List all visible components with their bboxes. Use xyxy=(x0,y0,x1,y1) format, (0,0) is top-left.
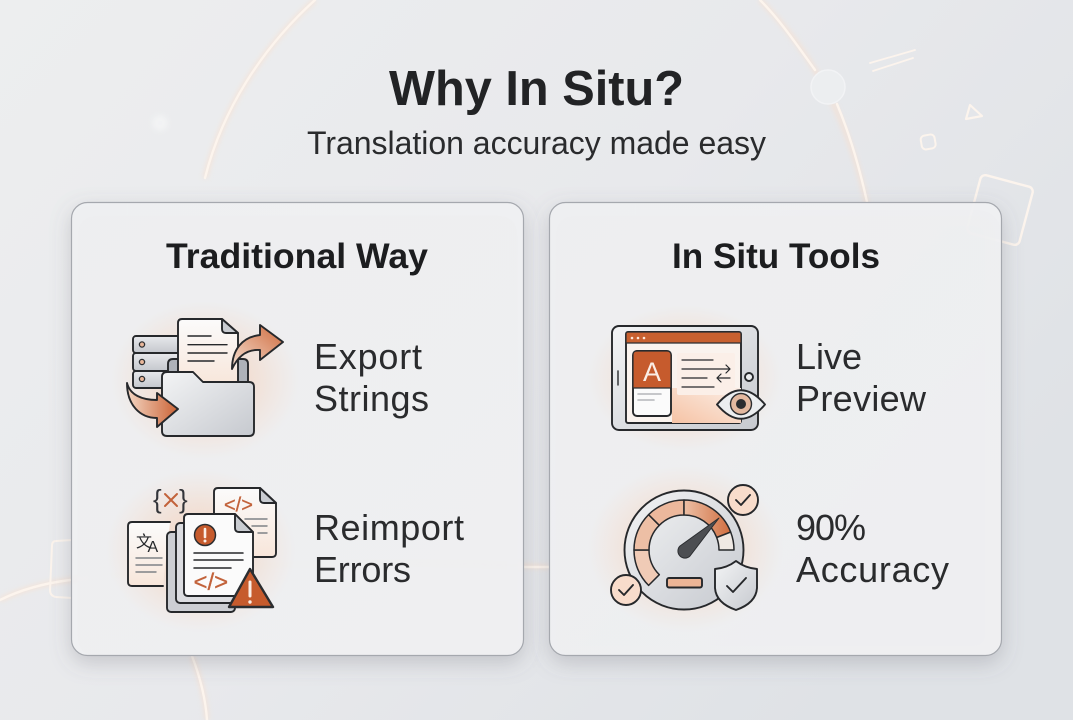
icon: live preview tablet: A xyxy=(643,357,661,387)
label: Live Preview xyxy=(796,336,927,419)
label: 90% Accuracy: 90% xyxy=(796,507,866,548)
icon: reimport errors: </> xyxy=(194,569,228,596)
icon: reimport errors: A xyxy=(148,539,158,556)
label: 90% Accuracy xyxy=(796,507,949,590)
icon: reimport errors: } xyxy=(179,484,188,514)
icon: export strings xyxy=(110,300,300,460)
label: Export Strings: Export xyxy=(314,336,422,377)
label: Live Preview: Live xyxy=(796,336,862,377)
label: Reimport Errors: Reimport xyxy=(314,507,464,548)
label: 90% Accuracy: Accuracy xyxy=(796,549,949,590)
icon: live preview tablet xyxy=(587,304,783,452)
icon: accuracy gauge xyxy=(587,464,783,632)
icon: reimport errors: 文 xyxy=(136,533,152,551)
icon: reimport errors: { xyxy=(153,484,162,514)
label: Export Strings xyxy=(314,336,429,419)
label: Reimport Errors xyxy=(314,507,464,590)
panel: In Situ Tools xyxy=(550,202,1002,656)
label: Live Preview: Preview xyxy=(796,378,927,419)
heading: Traditional Way: Traditional Way xyxy=(166,237,429,276)
label: Export Strings: Strings xyxy=(314,378,429,419)
label: Reimport Errors: Errors xyxy=(314,549,411,590)
panel: Traditional Way xyxy=(72,202,524,656)
heading: In Situ Tools: In Situ Tools xyxy=(672,237,880,276)
title: Why In Situ? xyxy=(389,62,684,116)
subtitle: Translation accuracy made easy xyxy=(307,125,766,161)
icon: reimport errors: </> xyxy=(224,494,253,516)
icon: reimport errors xyxy=(105,468,295,632)
